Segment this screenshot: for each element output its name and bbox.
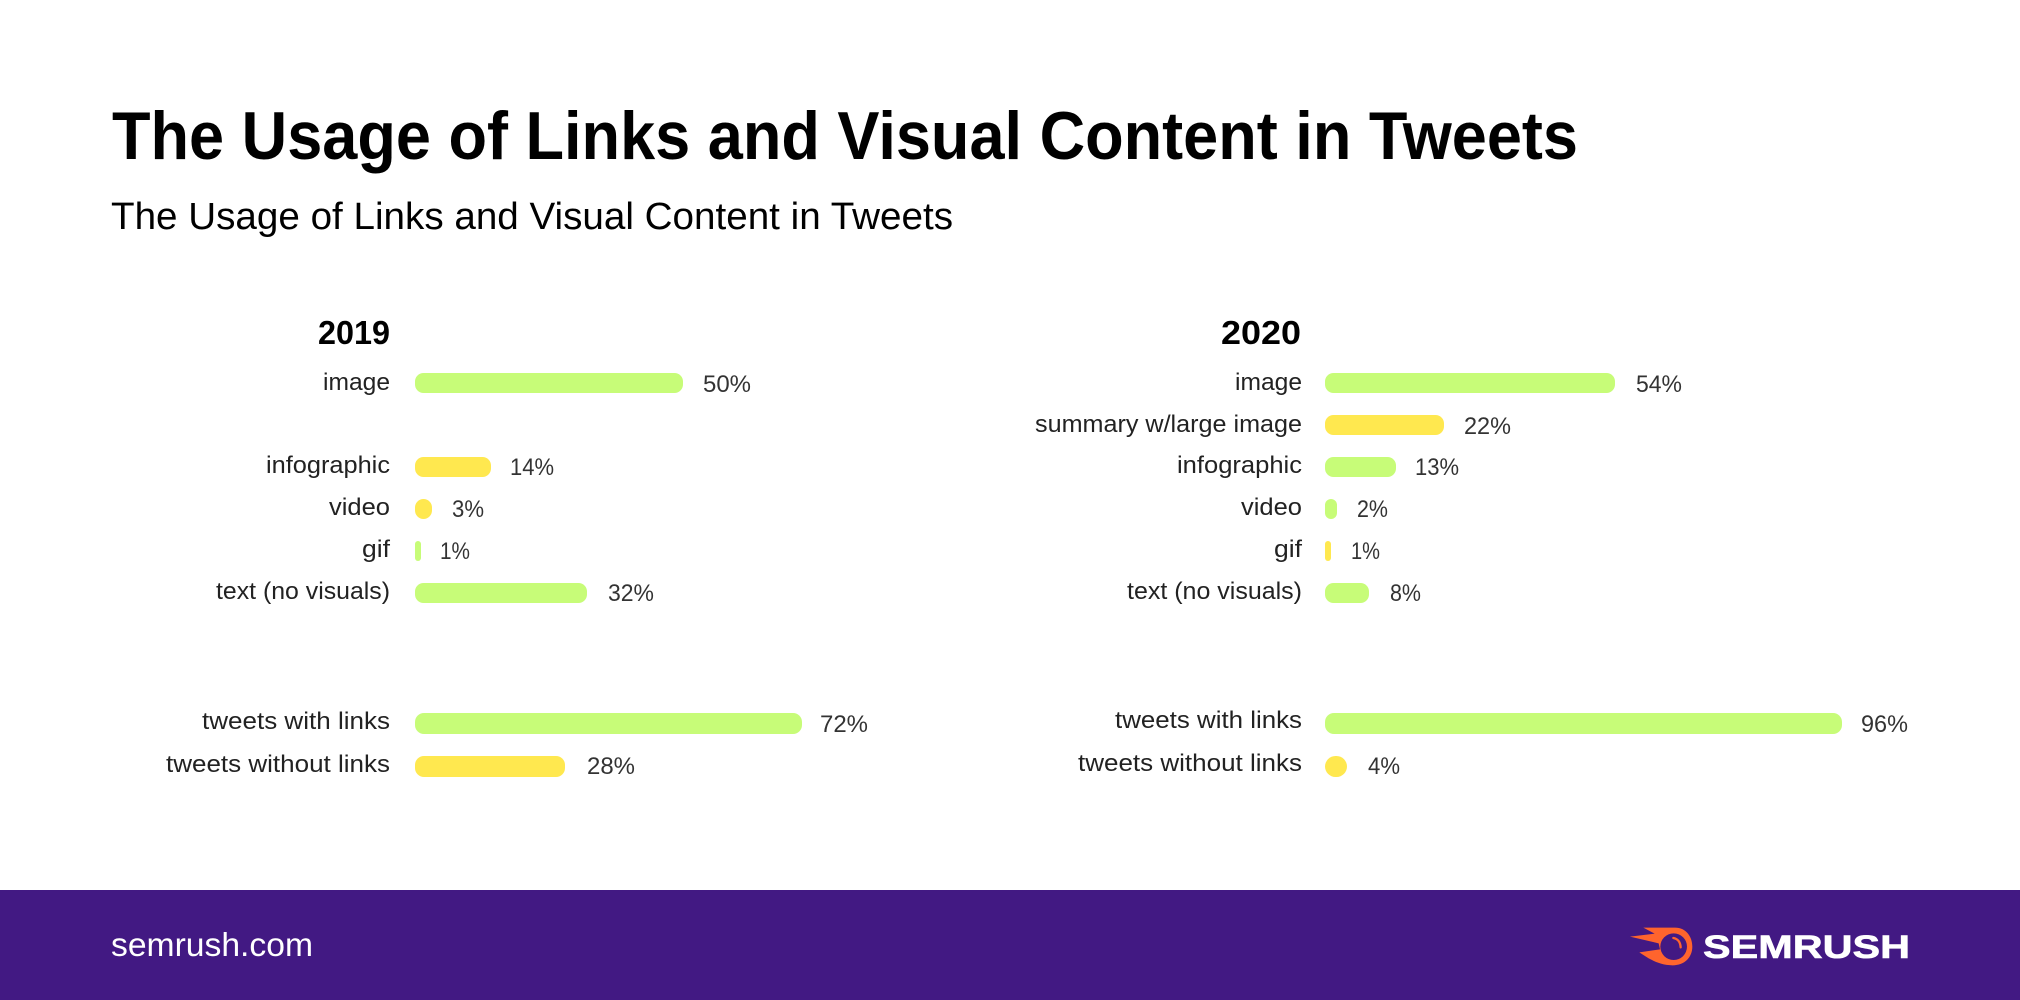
row: text (no visuals) 8% <box>1127 578 1421 607</box>
row: video 2% <box>1241 494 1388 523</box>
row: infographic 14%: 14% <box>510 454 554 481</box>
row: tweets without links 28% <box>166 751 635 780</box>
row: video 3% <box>329 494 484 523</box>
row: tweets with links 96%: 96% <box>1861 711 1908 738</box>
row: tweets with links 96%: tweets with links <box>1115 707 1302 734</box>
row: tweets with links 72% <box>202 708 868 738</box>
row: infographic 13%: 13% <box>1415 454 1459 481</box>
row: video 3%: video <box>329 494 390 521</box>
heading: 2020: 2020 <box>1221 314 1301 351</box>
panel: 2020 <box>1035 314 1908 780</box>
row: summary w/large image 22%: summary w/large image <box>1035 411 1302 438</box>
row: image 50%: image <box>323 369 390 396</box>
semrush logo <box>1630 928 1910 965</box>
icon: flame <box>1630 928 1692 965</box>
row: tweets with links 72%: 72% <box>820 711 868 738</box>
row: tweets with links 72%: tweets with links <box>202 708 390 735</box>
row: video 2%: video <box>1241 494 1302 521</box>
row: text (no visuals) 8%: text (no visuals) <box>1127 578 1302 605</box>
row: gif 1% <box>362 536 470 565</box>
row: infographic 13% <box>1177 452 1459 481</box>
row: tweets with links 96% <box>1115 707 1908 738</box>
row: video 3%: 3% <box>452 496 484 523</box>
title: The Usage of Links and Visual Content in Tweets <box>112 98 1578 174</box>
row: gif 1%: gif <box>362 536 390 563</box>
row: infographic 14%: infographic <box>266 452 390 479</box>
row: video 2%: 2% <box>1357 496 1388 523</box>
row: image 54%: image <box>1235 369 1302 396</box>
heading: 2019: 2019 <box>318 314 390 351</box>
row: text (no visuals) 32%: 32% <box>608 580 654 607</box>
row: tweets without links 28%: 28% <box>587 753 635 780</box>
row: summary w/large image 22%: 22% <box>1464 413 1511 440</box>
row: gif 1%: 1% <box>1351 538 1380 565</box>
row: image 54% <box>1235 369 1682 398</box>
row: tweets without links 4%: tweets without links <box>1078 750 1302 777</box>
row: gif 1%: 1% <box>440 538 470 565</box>
row: tweets without links 4% <box>1078 750 1400 780</box>
row: text (no visuals) 32%: text (no visuals) <box>216 578 390 605</box>
row: summary w/large image 22% <box>1035 411 1511 440</box>
panel: 2019 <box>166 314 868 780</box>
row: image 50%: 50% <box>703 371 751 398</box>
row: text (no visuals) 32% <box>216 578 654 607</box>
footer url: semrush.com <box>111 926 313 963</box>
footer band <box>0 890 2020 1000</box>
row: infographic 13%: infographic <box>1177 452 1302 479</box>
row: infographic 14% <box>266 452 554 481</box>
row: tweets without links 28%: tweets without links <box>166 751 390 778</box>
row: gif 1% <box>1274 536 1380 565</box>
row: gif 1%: gif <box>1274 536 1302 563</box>
row: tweets without links 4%: 4% <box>1368 753 1400 780</box>
row: text (no visuals) 8%: 8% <box>1390 580 1421 607</box>
subtitle: The Usage of Links and Visual Content in Tweets <box>111 196 953 238</box>
row: image 50% <box>323 369 751 398</box>
logo wordmark: SEMRUSH <box>1703 929 1910 965</box>
row: image 54%: 54% <box>1636 371 1682 398</box>
